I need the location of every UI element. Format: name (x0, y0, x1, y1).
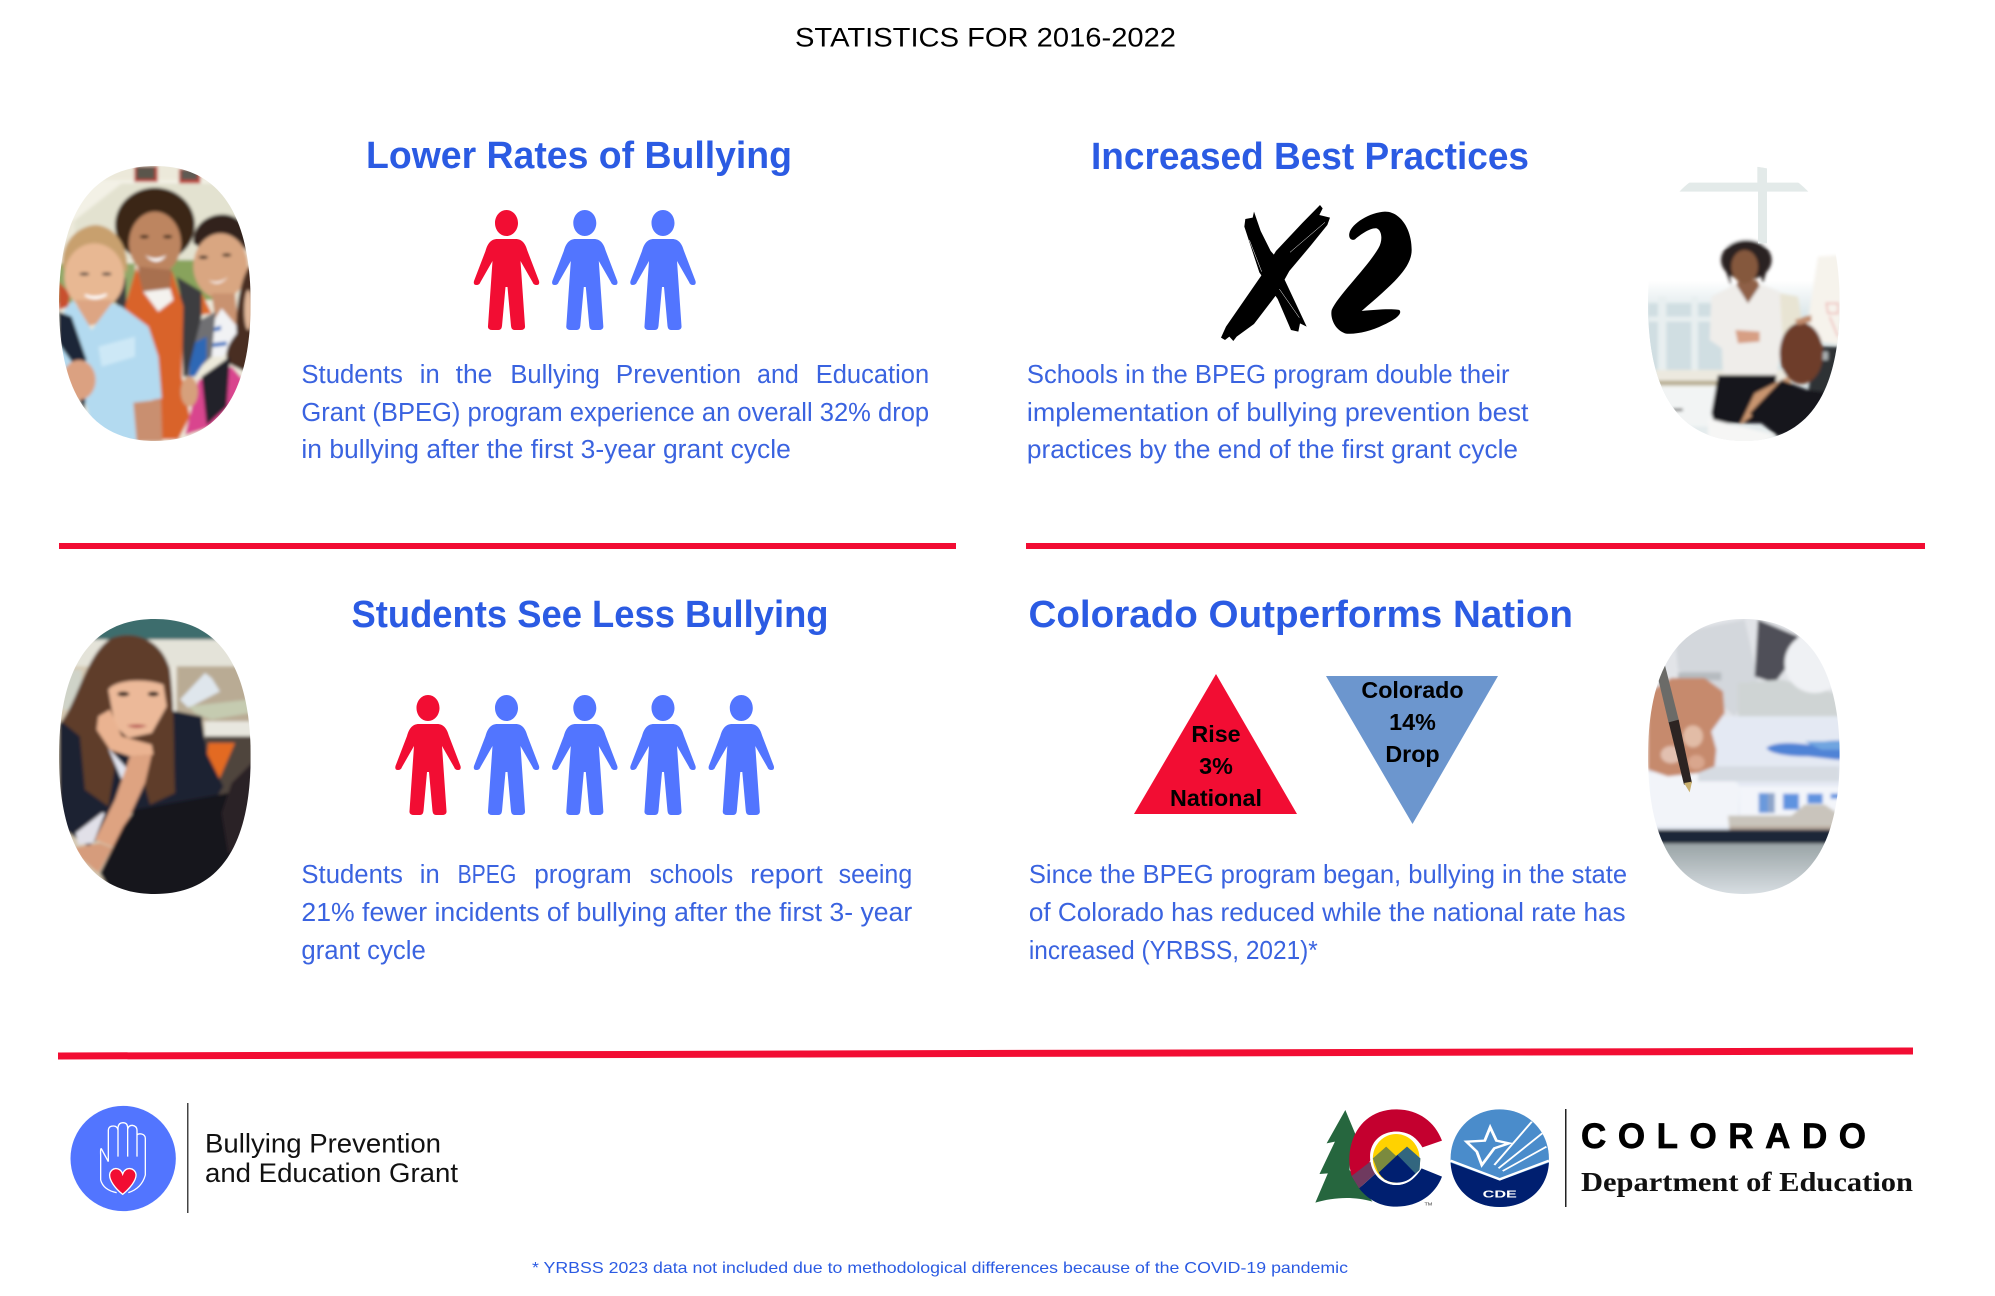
icon: cde seal (1451, 1109, 1549, 1207)
body text: practices by the end of the first grant cycle (1027, 436, 1518, 464)
heading: Students See Less Bullying (352, 594, 828, 636)
body text: in (420, 361, 440, 389)
icon: hand with heart (70, 1106, 176, 1211)
body text: of Colorado has reduced while the national rate has (1029, 899, 1626, 927)
body text (301, 361, 929, 464)
pen (1658, 666, 1679, 723)
logo: bullying prevention and education grant: Bullying Prevention (205, 1128, 441, 1158)
divider: footer (58, 1048, 1913, 1060)
window cross (1678, 167, 1810, 243)
body text: in (420, 861, 440, 889)
photo: smiling students (55, 160, 255, 447)
body text: the (456, 361, 492, 389)
body text: Prevention (616, 361, 741, 389)
logo: colorado department of education: COLORADO (1581, 1117, 1866, 1156)
body text: Bullying (510, 361, 600, 389)
heading: Increased Best Practices (1091, 136, 1529, 178)
logo: colorado department of education (1315, 1109, 1913, 1207)
body text: schools (650, 861, 733, 889)
body text: Grant (BPEG) program experience an overall 32% drop (301, 399, 929, 427)
photo: hand writing on charts (1648, 613, 1848, 900)
body text: Since the BPEG program began, bullying in the state (1029, 861, 1627, 889)
body text: in bullying after the first 3-year grant cycle (301, 436, 791, 464)
body text (1027, 361, 1528, 464)
logo: colorado department of education: Department of Education (1581, 1167, 1913, 1197)
triangle: colorado drop: Drop (1385, 741, 1440, 767)
panel: increased best practices (1027, 136, 1848, 464)
body text: report (750, 861, 823, 889)
divider: left (59, 543, 956, 549)
body text: 21% fewer incidents of bullying after the first 3- year (301, 899, 913, 927)
body text: Schools in the BPEG program double their (1027, 361, 1510, 389)
logo: bullying prevention and education grant: and Education Grant (205, 1158, 459, 1188)
body text: grant cycle (301, 937, 426, 965)
body text: program (534, 861, 632, 889)
icon: cde seal: CDE (1483, 1189, 1517, 1200)
body text (1029, 861, 1627, 965)
panel: lower rates of bullying (55, 135, 929, 464)
panel: colorado outperforms nation (1028, 594, 1848, 965)
photo: thoughtful student (55, 613, 255, 900)
triangle: colorado drop (1326, 676, 1498, 824)
divider: right (1026, 543, 1925, 549)
heading: Lower Rates of Bullying (366, 135, 792, 177)
logo: bullying prevention and education grant (70, 1103, 459, 1213)
body text: and (757, 361, 799, 389)
body text: increased (YRBSS, 2021)* (1029, 937, 1318, 965)
footnote: * YRBSS 2023 data not included due to methodological differences because of the COVID-19 pandemic (532, 1260, 1348, 1277)
body text: implementation of bullying prevention best (1027, 399, 1528, 427)
body text: Students (301, 361, 403, 389)
title: STATISTICS FOR 2016-2022 (795, 22, 1176, 52)
body text: BPEG (458, 861, 516, 889)
panel: students see less bullying (55, 594, 913, 965)
body text: seeing (839, 861, 912, 889)
icon: colorado c and tree (1315, 1109, 1442, 1207)
triangle: colorado drop: Colorado (1361, 677, 1464, 703)
icon: brushed X2 (1221, 205, 1412, 341)
icon: three people, one highlighted (474, 210, 696, 330)
body text: Education (816, 361, 929, 389)
heading: Colorado Outperforms Nation (1028, 594, 1573, 636)
triangle: national rise: Rise (1191, 721, 1241, 747)
body text: Students (301, 861, 403, 889)
icon: five people, one highlighted (395, 695, 774, 815)
triangle: national rise: 3% (1199, 753, 1233, 779)
photo: presenter in meeting (1648, 160, 1848, 447)
triangle: national rise: National (1170, 785, 1262, 811)
icon: colorado c and tree: TM (1425, 1202, 1432, 1207)
triangle: national rise (1134, 674, 1297, 814)
body text (301, 861, 913, 965)
triangle: colorado drop: 14% (1389, 709, 1436, 735)
